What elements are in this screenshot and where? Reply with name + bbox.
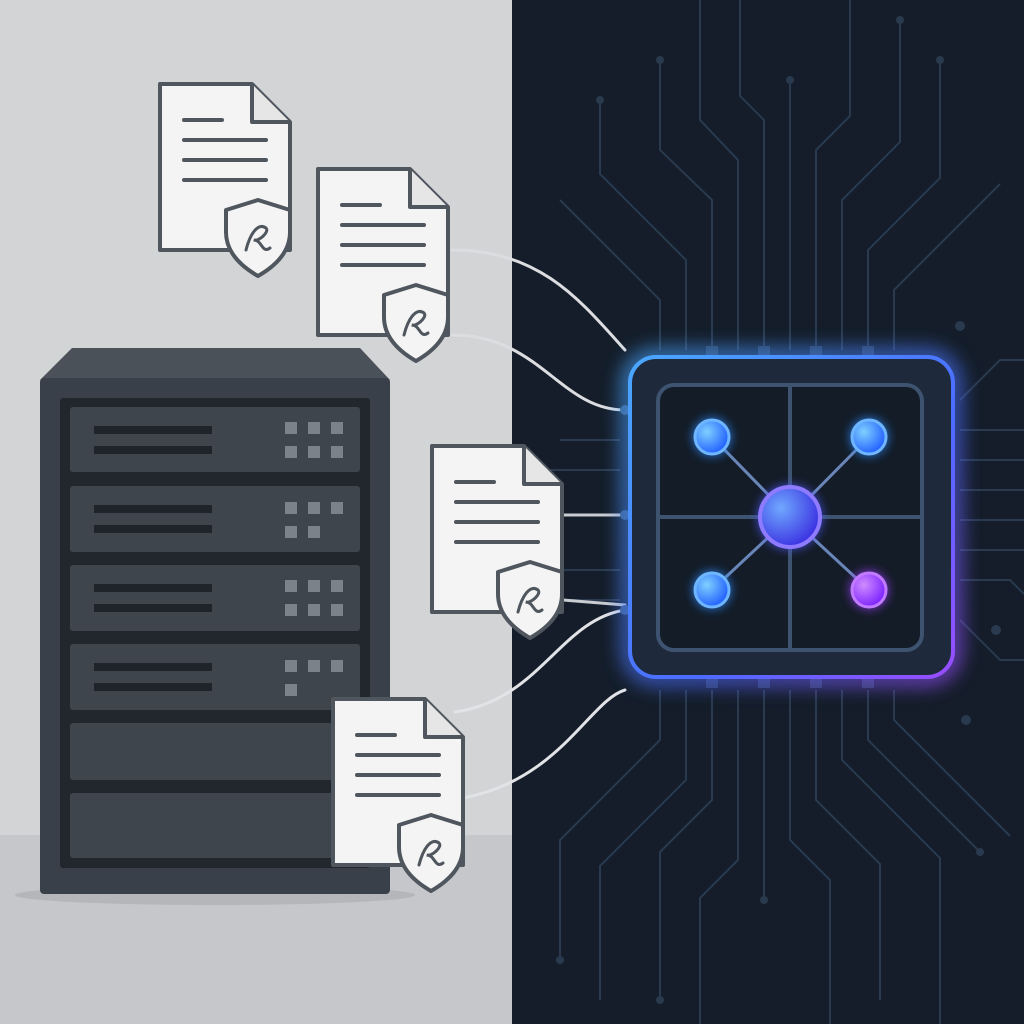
circuit traces	[540, 0, 1024, 1024]
connectors	[452, 250, 625, 798]
right background	[512, 0, 1024, 1024]
server rack	[15, 348, 415, 905]
left background	[0, 0, 512, 1024]
documents	[160, 84, 290, 276]
AI chip	[630, 346, 953, 688]
